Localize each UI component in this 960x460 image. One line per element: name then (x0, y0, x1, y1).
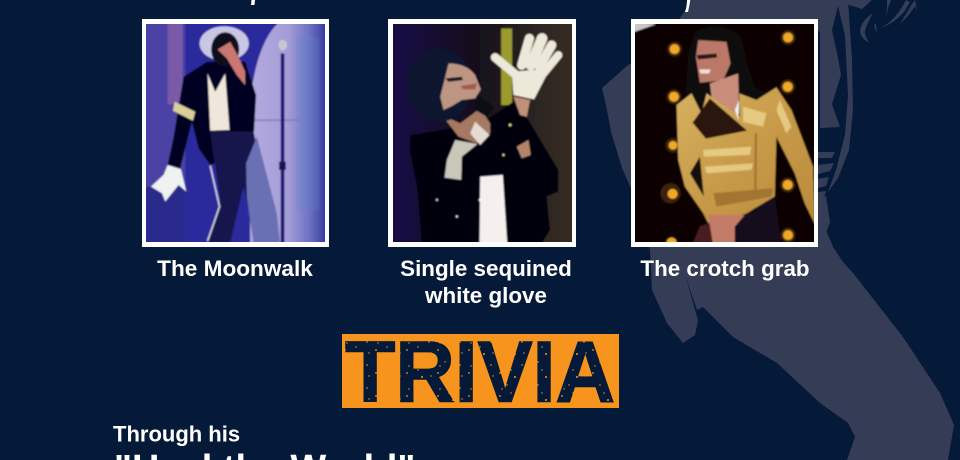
photo: The crotch grab (627, 17, 823, 250)
heading: TRIVIA: TRIVIA (345, 324, 615, 420)
caption: Single sequined white glove: white glove (424, 283, 547, 308)
text: Through his: Through his (113, 422, 240, 446)
caption: Single sequined white glove: Single sequined (400, 256, 572, 281)
photo: The Moonwalk (137, 17, 333, 250)
caption: The Moonwalk: The Moonwalk (157, 256, 313, 281)
title descenders cut off at top edge (251, 0, 690, 12)
photo: Single sequined white glove (384, 17, 583, 250)
dancer silhouette (602, 0, 954, 460)
trivia banner (342, 324, 619, 420)
caption: The crotch grab: The crotch grab (640, 256, 810, 281)
